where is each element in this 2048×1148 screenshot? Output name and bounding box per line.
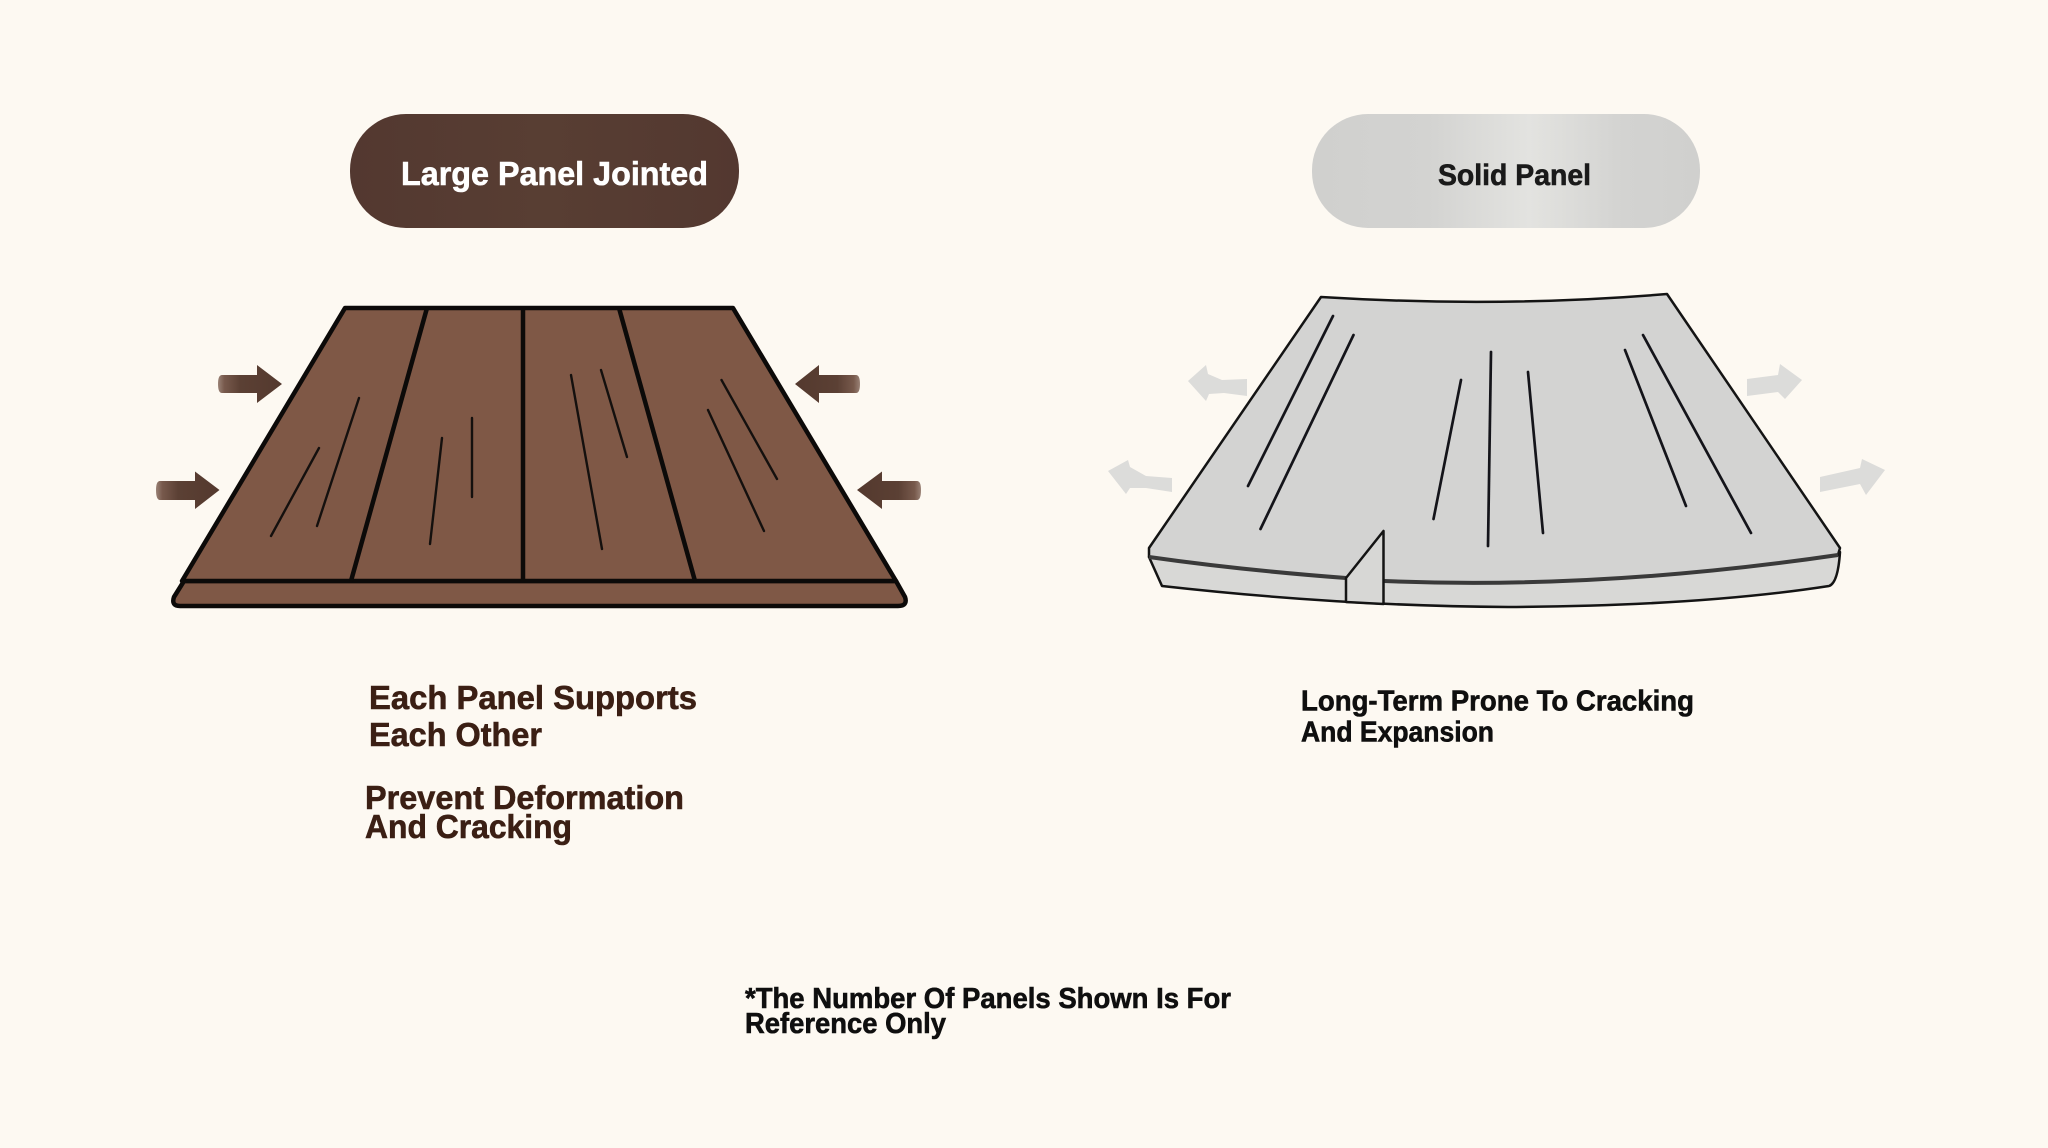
arrow: lower left pressing inward — [156, 472, 220, 509]
line two: Each Other — [369, 716, 542, 753]
drawback text — [1301, 686, 1694, 748]
board top face — [182, 308, 896, 581]
board front edge — [173, 581, 906, 606]
diagram: warped solid board — [1149, 294, 1840, 607]
benefit text: prevent deformation — [365, 779, 684, 845]
arrow: upper right pressing inward — [795, 365, 860, 403]
arrow: upper left pressing inward — [218, 365, 282, 403]
footnote — [745, 983, 1231, 1040]
arrow: upper left pushing outward — [1188, 365, 1247, 401]
heading pill: large panel jointed — [350, 114, 739, 228]
line one: Long-Term Prone To Cracking — [1301, 686, 1694, 718]
arrow: lower right pressing inward — [857, 472, 921, 509]
wood grain lines — [271, 370, 777, 549]
panel: solid panel — [1108, 114, 1885, 748]
benefit text: panels support — [369, 679, 697, 753]
line one: Each Panel Supports — [369, 679, 697, 716]
pill background — [1312, 114, 1700, 228]
arrow: upper right pushing outward — [1747, 364, 1802, 399]
line one: *The Number Of Panels Shown Is For — [745, 983, 1231, 1015]
panel: large panel jointed — [156, 114, 921, 845]
arrow: lower right pushing outward — [1820, 459, 1885, 495]
board top face — [1149, 294, 1840, 583]
arrow: lower left pushing outward — [1108, 460, 1172, 494]
heading text: Large Panel Jointed — [401, 155, 708, 192]
surface crack lines — [1248, 316, 1751, 546]
line two: And Cracking — [365, 808, 572, 845]
board side edge — [1149, 552, 1840, 607]
pill background — [350, 114, 739, 228]
panel joints — [351, 308, 695, 581]
diagram: jointed board — [173, 308, 906, 606]
heading pill: solid panel — [1312, 114, 1700, 228]
line two: Reference Only — [745, 1008, 946, 1040]
heading text: Solid Panel — [1438, 159, 1591, 192]
line one: Prevent Deformation — [365, 779, 684, 816]
crack notch — [1346, 531, 1384, 604]
front edge shadow line — [1149, 555, 1838, 583]
line two: And Expansion — [1301, 716, 1494, 748]
